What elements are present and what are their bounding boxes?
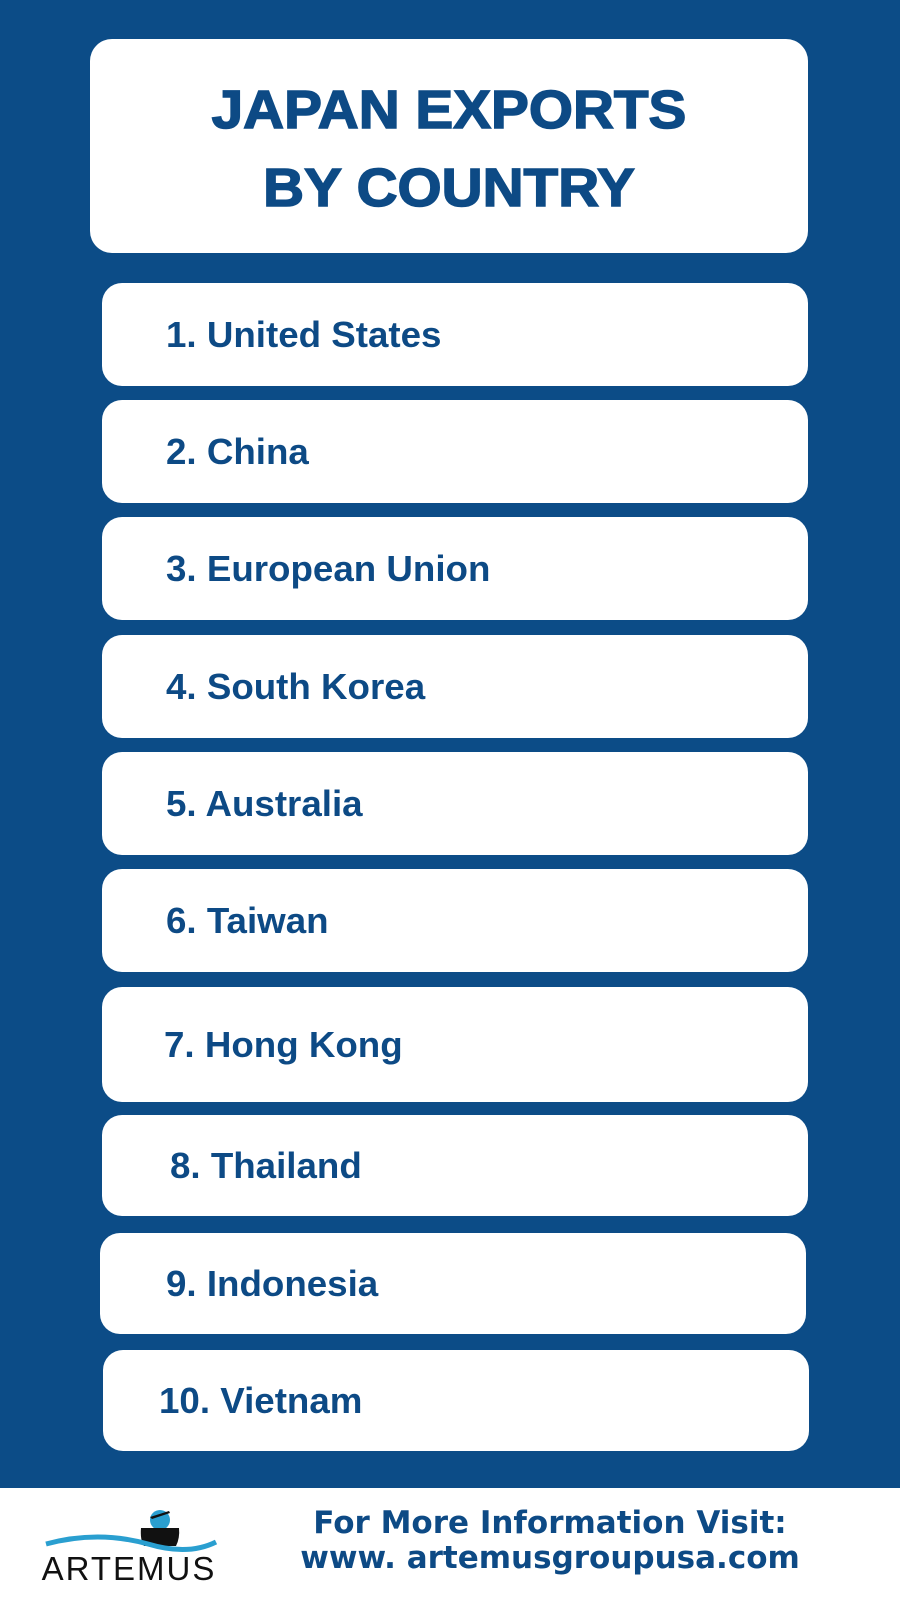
item 6: [102, 869, 808, 972]
item 10: [103, 1350, 809, 1451]
item 5: [102, 752, 808, 855]
item 6: 6. Taiwan: [166, 900, 329, 940]
item 3: [102, 517, 808, 620]
item 1: [102, 283, 808, 386]
item 3: 3. European Union: [166, 548, 490, 588]
item 7: [102, 987, 808, 1102]
item 1: 1. United States: [166, 314, 441, 354]
title: BY COUNTRY: [263, 158, 635, 218]
item 2: 2. China: [166, 430, 309, 472]
item 10: 10. Vietnam: [159, 1380, 362, 1420]
item 2: [102, 400, 808, 503]
item 5: 5. Australia: [166, 782, 363, 824]
footer: [0, 1488, 900, 1600]
logo: ARTEMUS: [42, 1550, 216, 1587]
item 9: 9. Indonesia: [166, 1262, 378, 1304]
item 9: [100, 1233, 806, 1334]
title: [212, 80, 686, 218]
logo: [42, 1510, 218, 1587]
footer text: For More Information Visit:: [313, 1505, 787, 1541]
footer text: www. artemusgroupusa.com: [300, 1540, 800, 1576]
item 7: 7. Hong Kong: [164, 1024, 403, 1064]
title panel: [90, 39, 808, 253]
item 8: 8. Thailand: [170, 1144, 362, 1186]
title: JAPAN EXPORTS: [212, 80, 686, 140]
item 4: 4. South Korea: [166, 666, 425, 706]
item 4: [102, 635, 808, 738]
item 8: [102, 1115, 808, 1216]
footer text: [300, 1505, 800, 1576]
